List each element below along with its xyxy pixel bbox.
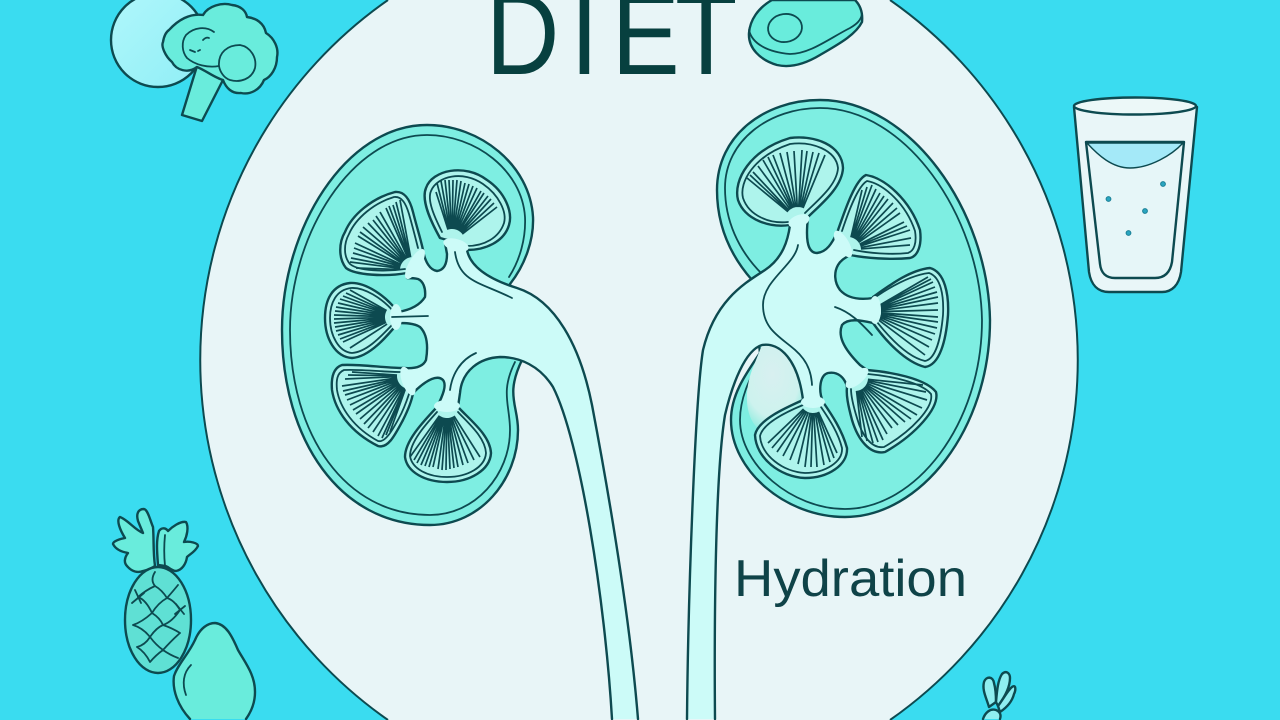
pineapple body: [125, 567, 191, 673]
right kidney outer capsule: [717, 100, 990, 517]
right kidney: [687, 100, 990, 719]
left lobe: middle: [325, 283, 398, 358]
glass rim: [1074, 98, 1196, 114]
left kidney: [282, 125, 638, 719]
pineapple leaves: [113, 509, 198, 572]
central circle panel: [200, 0, 1078, 720]
bubbles: [1106, 182, 1165, 235]
right lobe: top: [737, 137, 843, 226]
right kidney pale patch: [747, 345, 803, 430]
left lobe: bottom: [405, 405, 491, 482]
water surface: [1087, 143, 1183, 168]
glass body: [1074, 107, 1197, 292]
right hub highlights: [787, 212, 881, 408]
water: [1086, 142, 1184, 278]
left lobe: top: [425, 170, 510, 250]
left lobe: lower: [332, 365, 413, 446]
left kidney inner cortex: [290, 135, 525, 515]
right lobe: lower: [847, 370, 936, 452]
left kidney outer capsule: [282, 125, 533, 525]
right lobe: bottom: [755, 400, 847, 478]
label: Hydration: Hydration: [734, 550, 967, 608]
right kidney inner cortex: [725, 108, 982, 509]
left pelvis inner lines: [392, 252, 512, 390]
right lobe: upper: [837, 175, 921, 259]
round fruit: [111, 0, 205, 87]
right lobe: middle: [868, 268, 948, 367]
icon: avocado slice: [749, 0, 862, 66]
icon: water glass: [1074, 98, 1197, 292]
left renal pelvis and ureter: [398, 243, 638, 719]
broccoli florets: [162, 4, 277, 93]
left lobe: upper: [340, 192, 423, 275]
icon: carrot top: [983, 672, 1015, 719]
icon: pineapple: [113, 509, 198, 673]
icon: broccoli and round fruit: [111, 0, 277, 121]
right renal pelvis and ureter: [687, 217, 873, 719]
broccoli stem: [182, 66, 224, 121]
left hub highlights: [390, 236, 470, 412]
icon: pear-shaped fruit: [174, 623, 255, 719]
right pelvis inner lines: [763, 245, 872, 385]
